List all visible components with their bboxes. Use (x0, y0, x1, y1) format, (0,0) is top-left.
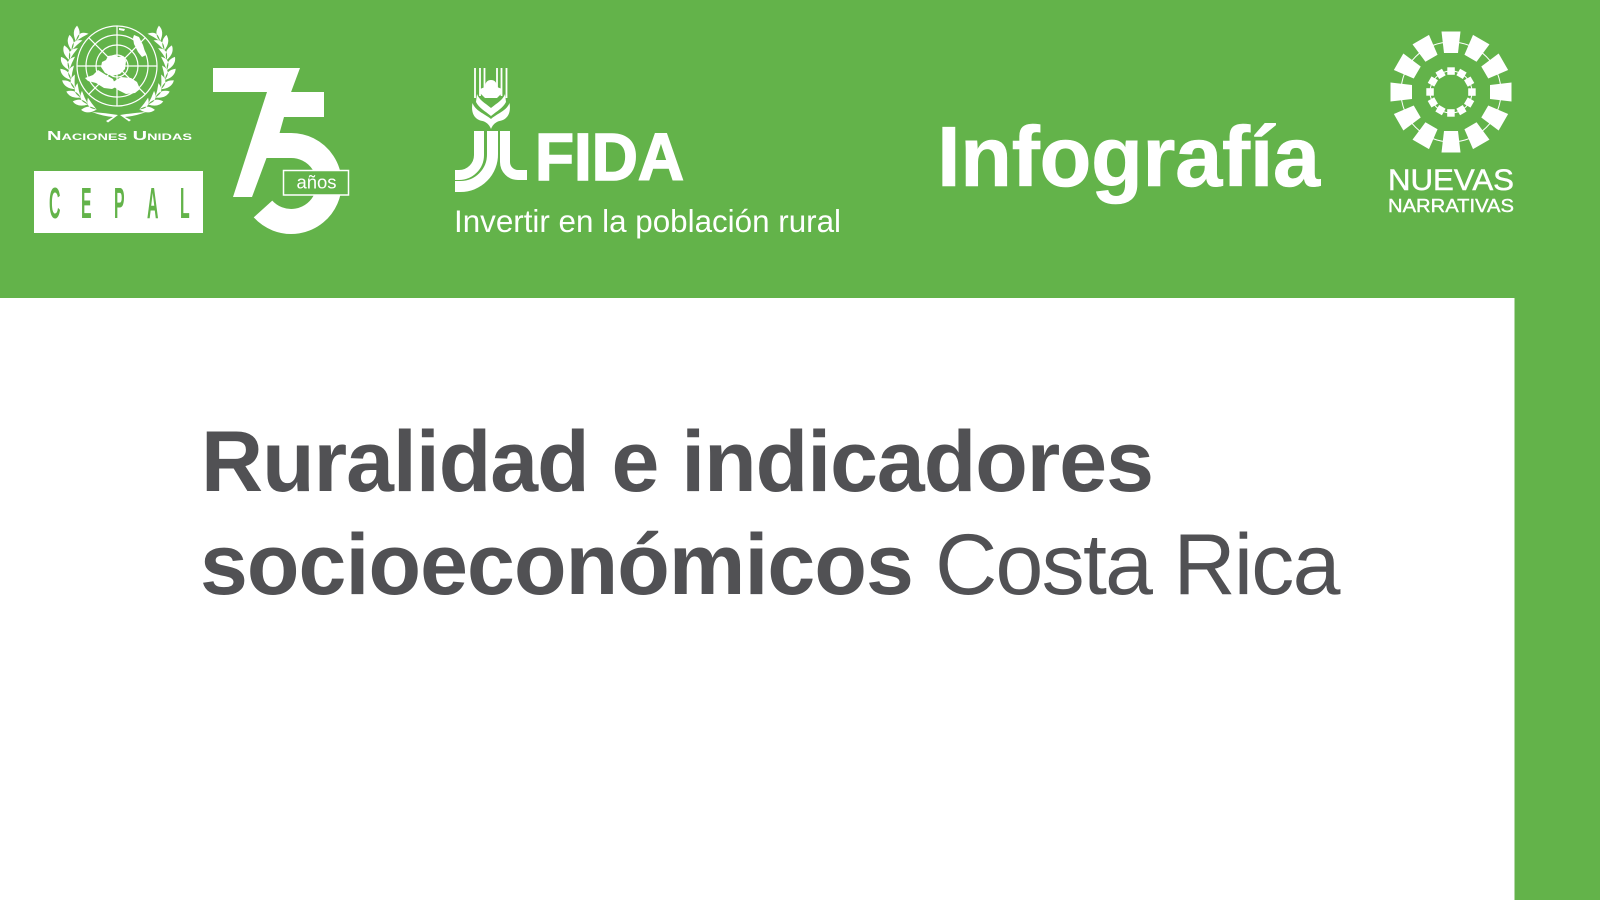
CEPAL wordmark: A (147, 179, 158, 229)
green header band (0, 0, 1600, 298)
numeral 7 (213, 68, 300, 197)
icon: inner gear ring (1426, 67, 1476, 117)
icon: wreath ribbon (92, 112, 146, 122)
CEPAL wordmark: E (81, 179, 92, 229)
label: Naciones Unidas: Naciones Unidas (47, 129, 192, 143)
logo: United Nations emblem (47, 25, 192, 143)
green right side band (1514, 0, 1600, 900)
heading: Infografía: Infografía (937, 110, 1321, 205)
icon: globe (77, 26, 157, 106)
CEPAL white box (34, 171, 203, 233)
tagline: Invertir en la población rural (454, 203, 841, 239)
logo: Nuevas Narrativas (1388, 32, 1514, 216)
icon: laurel wreath right (136, 25, 176, 116)
logo: 75 años (213, 68, 348, 221)
numeral 5 (262, 92, 329, 221)
CEPAL wordmark (49, 179, 190, 229)
icon: JJL emblem (455, 131, 527, 186)
icon: outer gear ring (1390, 32, 1512, 152)
FIDA wordmark: FIDA (535, 120, 684, 195)
title (200, 414, 1341, 613)
CEPAL wordmark: L (180, 179, 190, 229)
wordmark: NUEVAS: NUEVAS (1388, 164, 1514, 197)
title line 1: Ruralidad e indicadores (201, 414, 1153, 510)
logo: FIDA (454, 68, 841, 239)
logo: CEPAL (34, 171, 203, 233)
años label: años (296, 172, 337, 192)
title line 2 with country: socioeconómicos Costa Rica (200, 517, 1341, 613)
años label box (284, 170, 348, 195)
CEPAL wordmark: P (114, 179, 125, 229)
icon: wheat ear (472, 68, 510, 129)
icon: laurel wreath left (60, 25, 100, 116)
CEPAL wordmark: C (49, 179, 60, 229)
wordmark: NARRATIVAS: NARRATIVAS (1388, 195, 1514, 216)
